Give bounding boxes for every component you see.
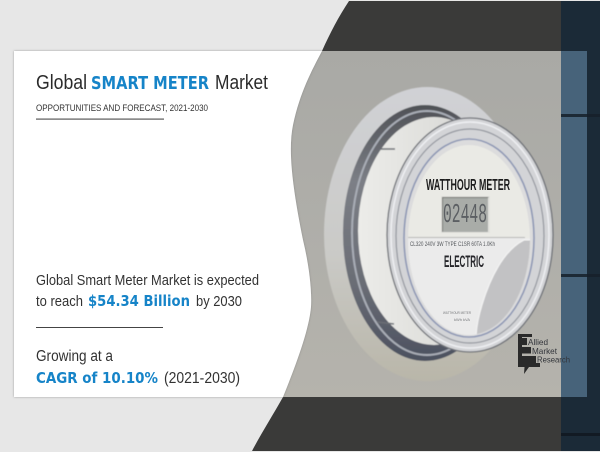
title: Global: [36, 72, 87, 94]
meter glass cover: [387, 118, 553, 352]
meter LCD display: [441, 196, 490, 233]
title: SMART METER: [91, 73, 209, 94]
subtitle: OPPORTUNITIES AND FORECAST, 2021-2030: [36, 103, 208, 114]
meter latch marks: [377, 149, 395, 324]
panel: white card: [14, 51, 322, 397]
text block: market size: [36, 272, 259, 310]
meter dark socket ring: [343, 105, 507, 361]
logo text: [528, 337, 570, 364]
text block: CAGR: (2021-2030): [164, 370, 240, 387]
panel: dark background band: [252, 1, 600, 451]
text block: CAGR: [36, 348, 240, 387]
text block: market size: Global Smart Meter Market is expected: [36, 272, 259, 289]
logo: Allied Market Research: [518, 334, 570, 374]
meter small print: WATTHOUR METER: [443, 311, 471, 315]
panel: wall behind meter: [270, 51, 561, 397]
meter mounting flange: [324, 87, 530, 381]
text block: market size: to reach: [36, 293, 83, 310]
text block: market size: by 2030: [196, 293, 242, 310]
title: [36, 72, 268, 94]
text block: CAGR: Growing at a: [36, 348, 113, 365]
illustration: smart meter: [324, 87, 553, 381]
text block: market size: $54.34 Billion: [88, 292, 190, 310]
meter glass highlights: [391, 122, 549, 348]
meter cylinder body: [358, 117, 510, 345]
title: Market: [215, 72, 268, 94]
meter face: [408, 145, 530, 335]
illustration: smart meter: ELECTRIC: [444, 253, 484, 271]
meter small print: kWh kVA: [454, 318, 471, 322]
panel: navy siding strip: [561, 1, 600, 451]
meter small print: [443, 311, 471, 322]
meter rating line: CL320 240V 3W TYPE C1SR 60TA 1.0Kh: [410, 242, 495, 248]
logo text: Research: [537, 354, 570, 364]
meter label: watthour meter: WATTHOUR METER: [426, 177, 510, 194]
logo text: Allied: [528, 337, 548, 347]
text block: CAGR: CAGR of 10.10%: [36, 369, 158, 387]
meter face grey crescent: [476, 240, 530, 334]
logo text: Market: [532, 346, 558, 356]
meter reading: 02448: [443, 201, 487, 231]
icon: report speech bubble: [518, 334, 540, 374]
